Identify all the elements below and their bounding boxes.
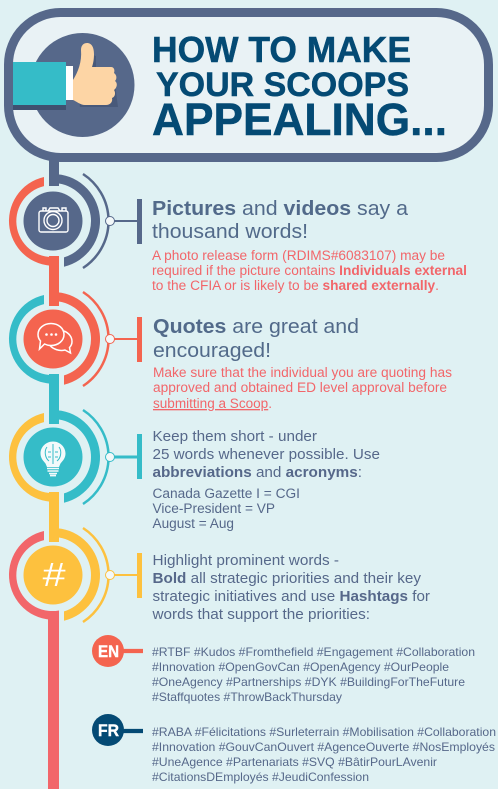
step 1: pictures: thousand words! bbox=[152, 220, 308, 243]
hashtag list EN bbox=[152, 645, 475, 704]
step 2: quotes: encouraged! bbox=[153, 339, 271, 362]
note 1: A photo release form (RDIMS#6083107) may be bbox=[152, 248, 445, 263]
abbreviation examples bbox=[152, 486, 300, 531]
note 2 bbox=[153, 365, 452, 411]
timeline node 4 bbox=[9, 528, 142, 789]
icon: hashtag: # bbox=[42, 556, 66, 593]
body text 3: abbreviations and acronyms: bbox=[152, 465, 362, 481]
icon: thumbs up bbox=[13, 33, 134, 137]
title: HOW TO MAKE bbox=[152, 29, 411, 70]
hashtag list EN: #Innovation #OpenGovCan #OpenAgency #OurPeople bbox=[152, 660, 449, 674]
hashtag list EN: #Staffquotes #ThrowBackThursday bbox=[152, 690, 342, 704]
note 2: approved and obtained ED level approval before bbox=[153, 380, 447, 395]
abbreviation examples: Vice-President = VP bbox=[152, 501, 275, 516]
hashtag list FR: #CitationsDEmployés #JeudiConfession bbox=[152, 770, 369, 784]
step 4: highlight bbox=[9, 528, 430, 789]
abbreviation examples: Canada Gazette I = CGI bbox=[152, 486, 300, 501]
body text 4: Bold all strategic priorities and their key bbox=[152, 571, 422, 587]
title: YOUR SCOOPS bbox=[156, 66, 409, 104]
badge: FR: FR bbox=[98, 722, 119, 740]
hashtag list FR: #RABA #Félicitations #Surleterrain #Mobilisation #Collaboration bbox=[152, 725, 496, 739]
icon: camera bbox=[39, 208, 68, 232]
hashtag list EN: #RTBF #Kudos #Fromthefield #Engagement #Collaboration bbox=[152, 645, 475, 659]
badge: EN: EN bbox=[98, 643, 119, 661]
hashtag list EN: #OneAgency #Partnerships #DYK #BuildingForTheFuture bbox=[152, 675, 465, 689]
french hashtags bbox=[92, 714, 496, 784]
note 2: Make sure that the individual you are quoting has bbox=[153, 365, 452, 380]
body text 4: words that support the priorities: bbox=[151, 607, 370, 623]
step 3: keep short bbox=[9, 410, 380, 542]
note 1: required if the picture contains Individuals external bbox=[152, 263, 467, 278]
note 1: to the CFIA or is likely to be shared externally. bbox=[152, 278, 439, 293]
badge: FR bbox=[92, 714, 143, 746]
title: APPEALING... bbox=[152, 94, 447, 145]
body text 4: Highlight prominent words - bbox=[152, 553, 339, 569]
hashtag list FR bbox=[152, 725, 496, 784]
icon: speech bubbles bbox=[38, 324, 72, 353]
step 1: pictures bbox=[9, 174, 467, 306]
timeline node 2 bbox=[9, 292, 142, 424]
icon: light bulb bbox=[40, 442, 66, 476]
heading 1: Pictures and videos say a bbox=[152, 197, 409, 220]
badge: EN bbox=[92, 635, 143, 667]
body text 3: 25 words whenever possible. Use bbox=[152, 447, 380, 463]
title bbox=[152, 29, 447, 145]
abbreviation examples: August = Aug bbox=[152, 516, 234, 531]
timeline node 1 bbox=[9, 174, 142, 306]
body text 4: strategic initiatives and use Hashtags for bbox=[152, 589, 430, 605]
note 1 bbox=[152, 248, 467, 293]
body text 4 bbox=[151, 553, 430, 623]
hashtag list FR: #Innovation #GouvCanOuvert #AgenceOuverte #NosEmployés bbox=[152, 740, 495, 754]
hashtag list FR: #UneAgence #Partenariats #SVQ #BâtirPourLAvenir bbox=[152, 755, 437, 769]
note 2: submitting a Scoop. bbox=[153, 396, 272, 411]
body text 3 bbox=[152, 429, 380, 481]
body text 3: Keep them short - under bbox=[152, 429, 317, 445]
timeline node 3 bbox=[9, 410, 142, 542]
header panel bbox=[8, 12, 488, 158]
step 2: quotes bbox=[9, 292, 452, 424]
english hashtags bbox=[92, 635, 475, 704]
connector from header bbox=[49, 160, 59, 186]
heading 2: Quotes are great and bbox=[153, 315, 359, 338]
